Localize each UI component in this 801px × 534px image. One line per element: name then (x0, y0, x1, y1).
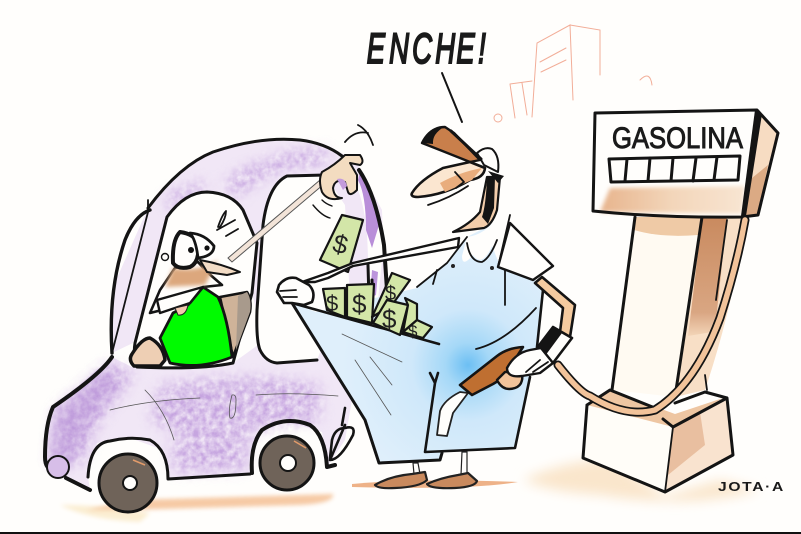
right cuff (537, 327, 572, 363)
neck (453, 177, 500, 232)
pump label: GASOLINA (612, 122, 743, 155)
roof edge purple pillar (358, 172, 384, 350)
bills in pouch: $ (326, 291, 338, 316)
bills in pouch: $ (382, 304, 397, 334)
surprise marks (217, 125, 373, 236)
head cap (422, 127, 504, 183)
rear wheel (260, 436, 314, 490)
lilac paint patches (50, 149, 330, 472)
driver face (150, 262, 222, 313)
driver (130, 125, 373, 366)
car (45, 139, 387, 512)
speech line (442, 73, 462, 122)
pump base (583, 405, 673, 492)
driver arm reaching to man (228, 180, 324, 262)
bills in pouch: $ (385, 283, 396, 305)
driver hand (130, 338, 165, 366)
bills in pouch: $ (408, 322, 418, 341)
pouch edge (292, 303, 439, 344)
flying bill: $ (330, 228, 352, 261)
overalls outline (292, 303, 442, 463)
gripping hand (507, 348, 553, 376)
gas pump (558, 110, 778, 492)
pump gauge (609, 156, 740, 182)
signature: JOTA·A (718, 479, 785, 494)
left arm holding pouch (302, 238, 459, 282)
pump head (593, 110, 778, 217)
car outlines (148, 139, 342, 208)
car windows cleared (133, 192, 257, 368)
face (412, 162, 485, 197)
right sleeve (498, 223, 553, 280)
driver seat (220, 292, 251, 357)
left hand (277, 278, 313, 305)
car body paint (45, 139, 385, 490)
front wheel (99, 454, 157, 512)
driver green shirt (160, 287, 232, 365)
bills in pouch (323, 273, 432, 341)
bills in pouch: $ (352, 289, 367, 319)
driver eyes (162, 232, 214, 268)
overalls (292, 215, 543, 463)
pump column (612, 217, 702, 397)
attendant (277, 127, 575, 488)
speech text: ENCHE! (367, 24, 486, 73)
fuel nozzle in hand (437, 347, 553, 436)
hose (558, 220, 745, 412)
ground shadows (60, 458, 760, 522)
bills (320, 215, 432, 341)
right arm (535, 277, 575, 337)
background buildings sketch (494, 25, 652, 122)
shoes and legs (375, 452, 477, 488)
bottom border line (0, 532, 801, 534)
white shirt at chest (462, 215, 510, 266)
driver grabbing hand (320, 155, 362, 199)
